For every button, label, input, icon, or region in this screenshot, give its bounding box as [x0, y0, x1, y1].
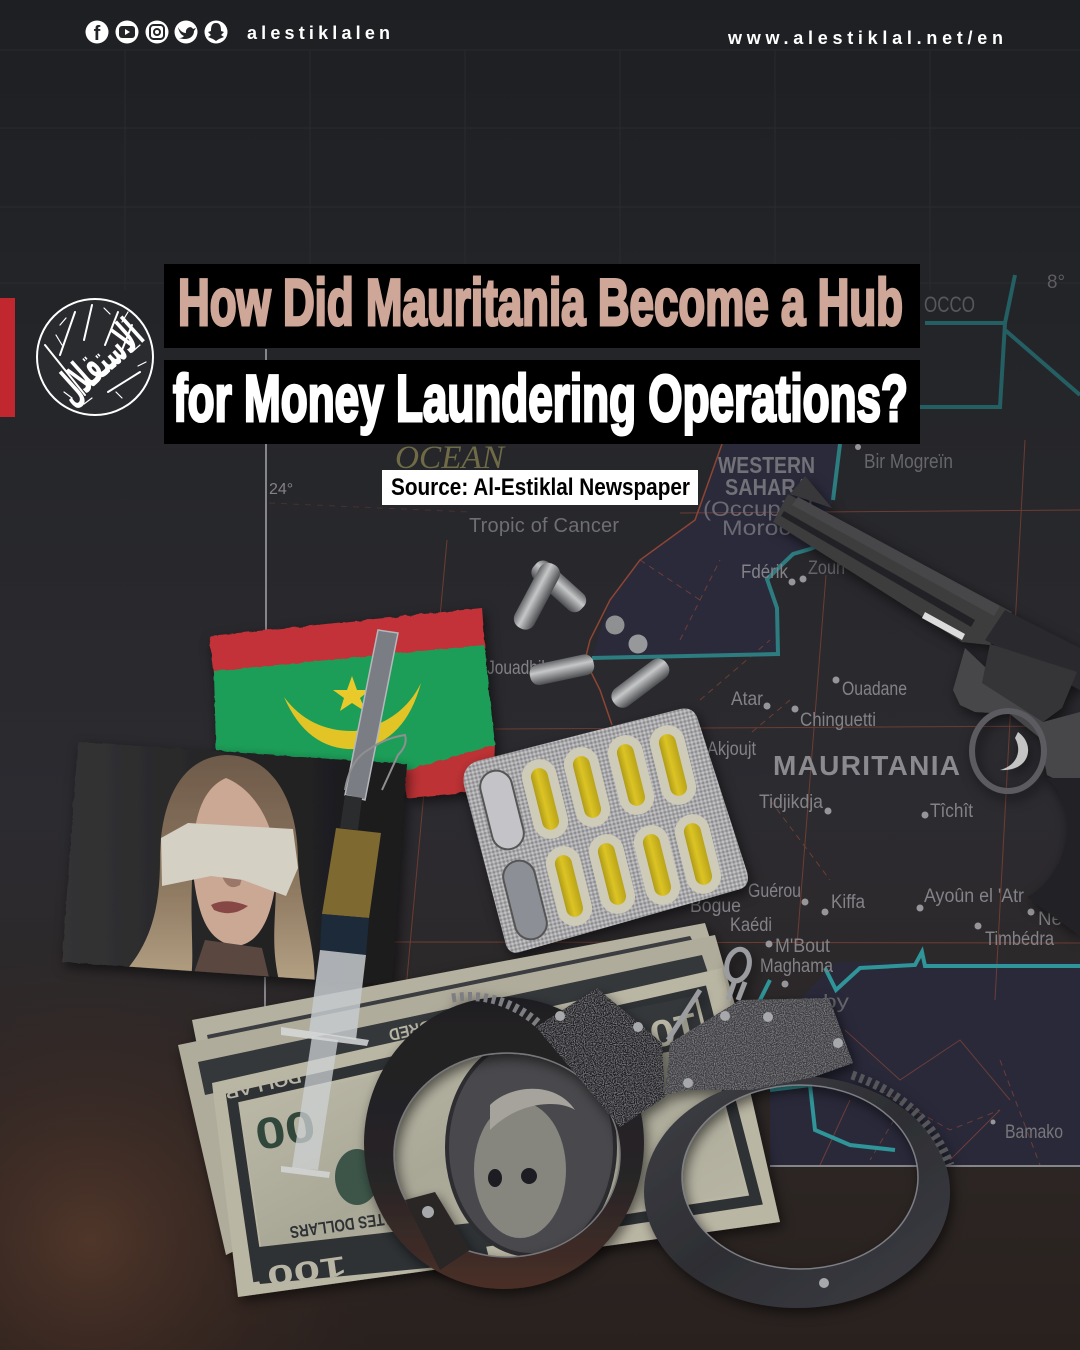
top engraved strip — [600, 996, 706, 1062]
numerals and lettering: STATES DOLLARS — [289, 1206, 410, 1242]
icon: facebook: f — [94, 23, 101, 45]
clear barrel — [309, 950, 366, 1040]
flag: top red band — [209, 608, 485, 673]
face — [193, 778, 276, 946]
map of Mauritania — [265, 272, 1080, 1166]
revolver — [773, 476, 1080, 936]
place labels: Morocco — [722, 517, 817, 540]
numerals and lettering: 00 — [251, 1100, 319, 1159]
source tag — [382, 470, 698, 505]
needle cap — [292, 1036, 338, 1170]
bill field — [240, 1000, 747, 1266]
place labels: Tropic of Cancer — [469, 515, 619, 537]
portrait face — [474, 1102, 566, 1238]
back bill 2 engraving — [198, 955, 712, 1095]
flag: crescent — [284, 683, 421, 749]
cuff: left lock plate — [536, 988, 665, 1127]
header: social icons — [86, 20, 228, 45]
place labels: Kaédi — [730, 915, 772, 936]
lips — [211, 901, 248, 913]
barrel under-rib shadow — [781, 511, 975, 627]
bullet tips — [606, 616, 648, 654]
trigger — [1000, 732, 1028, 770]
numerals and lettering — [211, 1001, 703, 1292]
portrait eyes — [488, 1168, 537, 1187]
back bill 2 — [178, 935, 735, 1255]
place labels: 8° — [1047, 272, 1065, 293]
portrait oval — [447, 1039, 615, 1255]
neck — [194, 940, 269, 976]
logo: calligraphy roundel — [37, 299, 154, 415]
place labels: Zoun — [808, 558, 845, 579]
place labels: Bogue — [690, 896, 741, 917]
border lines — [592, 275, 1080, 1150]
place labels: WESTERN — [718, 452, 815, 478]
ejector highlight — [922, 612, 965, 640]
source tag: Source: Al-Estiklal Newspaper — [391, 474, 690, 501]
base flange — [281, 1166, 330, 1178]
place labels: Tidjikdja — [759, 792, 823, 813]
barrel highlight — [792, 497, 1000, 616]
back bill 1 engraving — [207, 936, 702, 1058]
place labels: M'Bout — [775, 936, 831, 957]
top strap — [985, 610, 1080, 690]
frame — [953, 648, 1080, 792]
bill border engraving — [232, 992, 756, 1276]
bullet 3 — [528, 653, 596, 687]
stopper — [340, 795, 362, 830]
foil empties — [477, 767, 550, 943]
numerals and lettering: 100 — [265, 1250, 348, 1292]
cylinder — [982, 644, 1077, 722]
stack of dollar bills — [178, 923, 780, 1297]
cuff: left lower plate — [405, 1192, 470, 1270]
grip — [1027, 778, 1080, 936]
place labels: Bamako — [1005, 1122, 1063, 1143]
dark band — [320, 914, 369, 955]
liquid barrel — [322, 828, 381, 918]
blister pack of yellow pills — [464, 708, 748, 953]
website url: www.alestiklal.net/en — [727, 28, 1003, 48]
place labels: Guérou — [748, 881, 801, 902]
cuff: right inner rim — [682, 1085, 918, 1269]
bullet 2 — [510, 559, 564, 633]
front bill — [212, 968, 780, 1297]
bullets — [510, 557, 673, 712]
bottom engraved strip — [250, 1222, 490, 1284]
handle: alestiklalen: alestiklalen — [247, 23, 390, 43]
place labels — [269, 272, 1065, 1143]
cuff: left teeth — [452, 997, 540, 1025]
cuff: right ring — [644, 1076, 950, 1308]
hair — [122, 755, 315, 990]
place labels: Kiffa — [831, 892, 865, 913]
place labels: Akjoujt — [707, 739, 757, 760]
nose shadow — [222, 878, 242, 888]
place labels: Ouadane — [842, 679, 907, 700]
place labels: SAHARA — [725, 474, 810, 500]
coastline — [585, 444, 722, 725]
place labels: Atar — [731, 689, 764, 710]
cuff: rivets — [422, 1011, 843, 1288]
back bill 1 — [192, 923, 725, 1085]
barrel — [773, 494, 1012, 645]
place labels: Né — [1038, 909, 1062, 930]
place labels: Tîchît — [930, 801, 974, 822]
place labels: Ayoûn el 'Atr — [924, 886, 1025, 907]
handcuffs — [364, 947, 950, 1308]
place labels: Jouadhib — [487, 658, 550, 679]
place labels: Chinguetti — [800, 710, 876, 731]
cuff: right teeth — [852, 1075, 950, 1165]
plunger rod — [345, 630, 398, 800]
chain — [668, 947, 753, 1040]
front sight — [790, 476, 832, 508]
flag: green field — [214, 645, 495, 772]
syringe — [281, 630, 406, 1178]
icon: snapchat — [204, 20, 228, 44]
place labels: OCEAN — [395, 440, 506, 476]
place labels: 24° — [269, 481, 293, 498]
logo: calligraphy roundel: الاستقلال — [45, 309, 154, 414]
pills — [524, 727, 719, 924]
icon: facebook — [86, 20, 108, 45]
icon: twitter — [174, 20, 198, 44]
numerals and lettering: ONE HUNDRED — [387, 1001, 498, 1044]
city dots — [764, 444, 1034, 1124]
place labels: OCCO — [924, 292, 975, 317]
flag: bottom red band — [400, 742, 495, 798]
numerals and lettering: DOLLARS — [211, 1068, 303, 1105]
place labels: Fdérik — [741, 562, 788, 583]
trigger guard — [972, 711, 1044, 791]
photo: blindfolded woman — [62, 742, 407, 990]
bullet 1 — [528, 557, 590, 616]
territory: southern shading — [770, 962, 1080, 1165]
cuff: right lock plate — [665, 998, 853, 1095]
place labels: by — [823, 992, 850, 1013]
place labels: (Occupied — [703, 498, 813, 521]
place labels: Bir Mogreïn — [864, 451, 953, 473]
cuff: left inner rim — [394, 1053, 620, 1257]
red accent bar — [0, 298, 15, 417]
icon: youtube — [116, 20, 138, 44]
seal — [335, 1149, 379, 1205]
icon: instagram — [146, 20, 168, 44]
blindfold — [161, 823, 298, 896]
flange — [281, 1027, 369, 1046]
plunger clip — [345, 735, 406, 790]
place labels: Timbédra — [985, 929, 1054, 950]
cuff: left ring — [364, 997, 644, 1289]
portrait hair — [490, 1089, 575, 1130]
bullet 4 — [607, 654, 673, 712]
flag of Mauritania — [209, 608, 495, 798]
place labels: MAURITANIA — [773, 750, 960, 781]
numerals and lettering: 100 — [621, 1003, 703, 1061]
territory: Western Sahara shading — [592, 444, 840, 658]
flag: star — [333, 676, 370, 712]
place labels: Maghama — [760, 956, 833, 977]
